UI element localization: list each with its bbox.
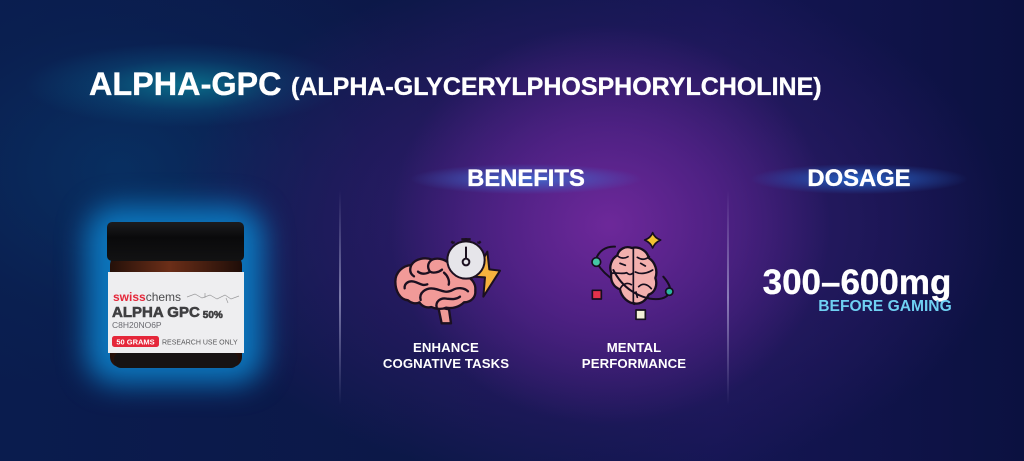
caption: mental performance: MENTAL [607,340,661,355]
caption: enhance cognative tasks [383,340,509,370]
divider [339,190,341,405]
product glow [86,206,264,384]
caption: mental performance [582,340,686,370]
dosage value: 300–600mg [763,263,951,302]
caption: mental performance: PERFORMANCE [582,356,686,370]
icon: brain with stopwatch and lightning bolt [394,238,501,324]
icon: supplement jar: C8H20NO6P [112,320,162,330]
title: ALPHA-GPC (ALPHA-GLYCERYLPHOSPHORYLCHOLINE) [89,66,822,102]
heading: benefits [410,160,642,198]
divider [727,190,729,405]
panel: product [66,188,284,404]
caption: enhance cognative tasks: COGNATIVE TASKS [383,356,509,370]
heading: dosage [750,160,968,198]
icon: supplement jar: 50% [203,310,223,321]
icon: supplement jar: ALPHA GPC [112,304,200,321]
caption: enhance cognative tasks: ENHANCE [413,340,479,355]
dosage note: BEFORE GAMING [818,298,952,315]
icon: supplement jar: swisschems [113,290,181,304]
icon: supplement jar: RESEARCH USE ONLY [162,340,238,346]
heading: dosage: DOSAGE [807,165,911,192]
icon: brain with orbit and stars [591,232,674,320]
icon: supplement jar: 50 GRAMS [116,338,155,346]
icon: supplement jar [107,222,244,368]
heading: benefits: BENEFITS [467,165,585,192]
